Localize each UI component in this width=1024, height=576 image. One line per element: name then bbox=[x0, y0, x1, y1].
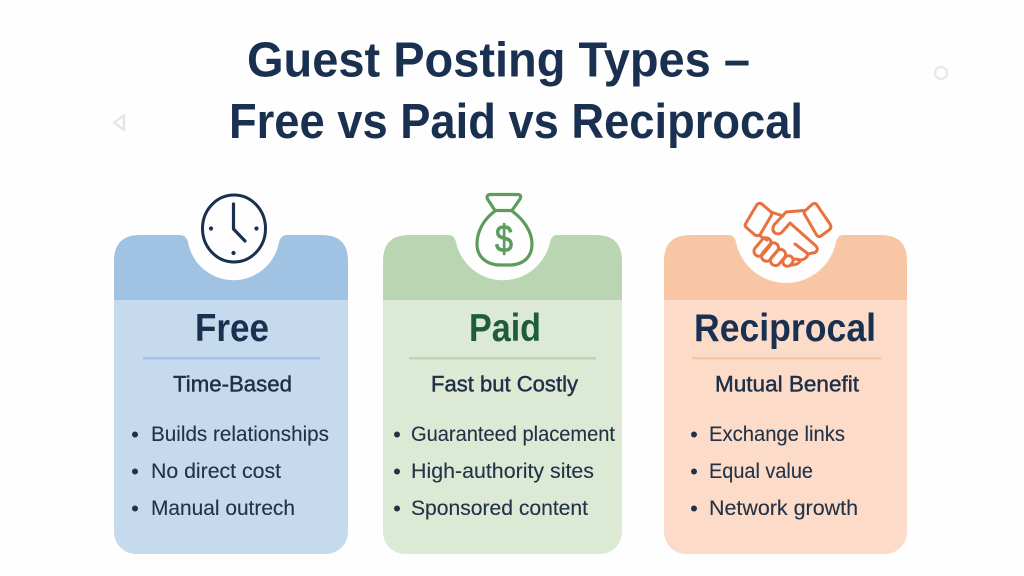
reciprocal subheading: Mutual Benefit bbox=[715, 372, 859, 396]
paid subheading: Fast but Costly bbox=[431, 372, 578, 396]
panel: paid bbox=[383, 194, 622, 554]
free heading: Free bbox=[195, 307, 269, 350]
reciprocal card body bbox=[664, 300, 907, 554]
paid heading: Paid bbox=[469, 307, 541, 350]
paid card header bbox=[383, 235, 622, 300]
title bbox=[229, 34, 803, 149]
free list: Manual outrech bbox=[151, 496, 295, 520]
panel: free bbox=[114, 195, 348, 554]
free list: No direct cost bbox=[151, 459, 281, 483]
reciprocal card header bbox=[664, 235, 907, 300]
decorative triangle bbox=[114, 116, 124, 130]
free card header bbox=[114, 235, 348, 300]
free subheading: Time-Based bbox=[173, 372, 292, 396]
dollar sign: $ bbox=[495, 218, 513, 261]
reciprocal heading: Reciprocal bbox=[694, 307, 876, 350]
paid list: Guaranteed placement bbox=[411, 422, 615, 446]
free list: Builds relationships bbox=[151, 422, 329, 446]
free card body bbox=[114, 300, 348, 554]
icon: money bag bbox=[477, 194, 532, 265]
title: Free vs Paid vs Reciprocal bbox=[229, 95, 803, 149]
paid list bbox=[394, 422, 615, 520]
paid list: High-authority sites bbox=[411, 459, 594, 483]
reciprocal list: Exchange links bbox=[709, 422, 845, 446]
reciprocal list bbox=[691, 422, 858, 520]
icon: handshake bbox=[745, 203, 831, 268]
panel: reciprocal bbox=[664, 203, 907, 554]
title: Guest Posting Types – bbox=[247, 34, 750, 88]
icon: clock bbox=[202, 195, 266, 262]
paid list: Sponsored content bbox=[411, 496, 588, 520]
reciprocal list: Equal value bbox=[709, 459, 813, 483]
reciprocal list: Network growth bbox=[709, 496, 858, 520]
free list bbox=[132, 422, 329, 520]
decorative circle bbox=[935, 67, 947, 79]
paid card body bbox=[383, 300, 622, 554]
